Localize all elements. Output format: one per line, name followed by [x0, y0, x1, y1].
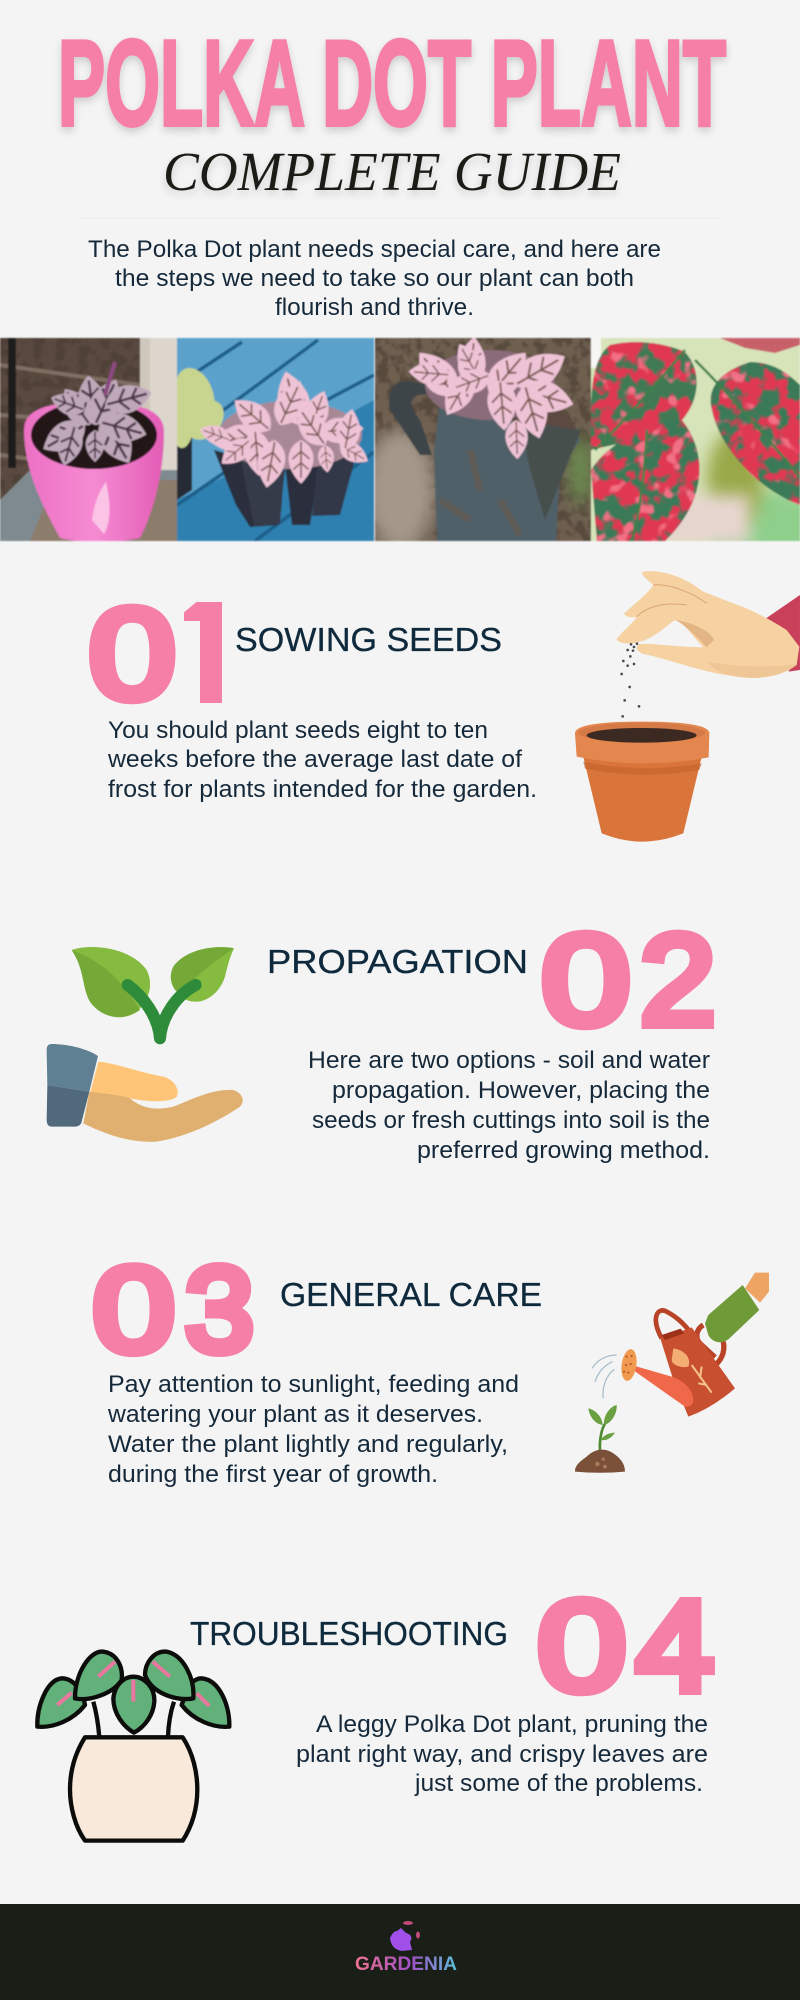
step number 03 — [93, 1243, 254, 1377]
icon: sprout over open hand — [47, 947, 243, 1142]
step number 02 — [542, 909, 716, 1052]
step number 01: 1 — [183, 583, 242, 726]
heading: sowing seeds: SOWING SEEDS — [235, 622, 502, 659]
text: troubleshooting body — [296, 1711, 708, 1797]
text: general care body: during the first year of growth. — [108, 1461, 438, 1488]
text: troubleshooting body: A leggy Polka Dot plant, pruning the — [316, 1711, 708, 1738]
heading: propagation: PROPAGATION — [267, 944, 528, 981]
intro paragraph — [88, 236, 661, 321]
step number 03: 0 — [93, 1243, 174, 1377]
text: sowing seeds body: You should plant seeds eight to ten — [108, 717, 488, 744]
text: propagation body: preferred growing method. — [417, 1137, 710, 1164]
step number 01: 0 — [89, 583, 176, 726]
text: troubleshooting body: plant right way, and crispy leaves are — [296, 1741, 708, 1768]
step number 02: 2 — [640, 909, 716, 1052]
intro paragraph: flourish and thrive. — [275, 294, 474, 321]
logo: Gardenia — [355, 1921, 457, 1975]
step number 04: 4 — [636, 1575, 714, 1718]
heading: troubleshooting: TROUBLESHOOTING — [190, 1616, 508, 1653]
text: general care body: Pay attention to sunlight, feeding and — [108, 1371, 519, 1398]
icon: watering can and sprout — [575, 1273, 769, 1473]
photo: pink pot — [0, 338, 177, 542]
step number 02: 0 — [542, 909, 630, 1052]
text: sowing seeds body: frost for plants intended for the garden. — [108, 776, 537, 803]
footer band — [0, 1904, 800, 2000]
photo strip — [0, 336, 800, 542]
step number 04: 0 — [538, 1575, 626, 1718]
text: sowing seeds body: weeks before the average last date of — [107, 746, 522, 773]
step 4 section — [37, 1575, 714, 1841]
photo: red and green leaves closeup — [590, 337, 800, 542]
text: propagation body: propagation. However, placing the — [332, 1077, 710, 1104]
text: general care body: watering your plant as it deserves. — [107, 1401, 483, 1428]
intro paragraph: The Polka Dot plant needs special care, and here are — [88, 236, 661, 263]
text: general care body — [107, 1371, 519, 1488]
step 3 section — [93, 1243, 769, 1488]
step number 04 — [538, 1575, 714, 1718]
text: general care body: Water the plant lightly and regularly, — [108, 1431, 508, 1458]
step number 01 — [89, 602, 222, 704]
photo: rusty watering can — [365, 336, 592, 550]
intro paragraph: the steps we need to take so our plant can both — [115, 265, 634, 292]
icon: potted polka dot plant — [37, 1652, 229, 1841]
text: propagation body — [308, 1047, 710, 1164]
step number 03: 3 — [185, 1243, 254, 1377]
heading: general care: GENERAL CARE — [280, 1277, 542, 1314]
text: propagation body: Here are two options - soil and water — [308, 1047, 710, 1074]
text: propagation body: seeds or fresh cuttings into soil is the — [312, 1107, 710, 1134]
step 1 section — [89, 571, 800, 842]
text: sowing seeds body — [107, 717, 537, 803]
logo: Gardenia: GARDENIA — [355, 1954, 457, 1975]
step 2 section — [47, 909, 716, 1164]
icon: hand sprinkling seeds into pot — [575, 571, 800, 842]
photo: plants on blue deck — [169, 338, 374, 541]
text: troubleshooting body: just some of the problems. — [414, 1770, 703, 1797]
subtitle: COMPLETE GUIDE — [163, 141, 621, 202]
